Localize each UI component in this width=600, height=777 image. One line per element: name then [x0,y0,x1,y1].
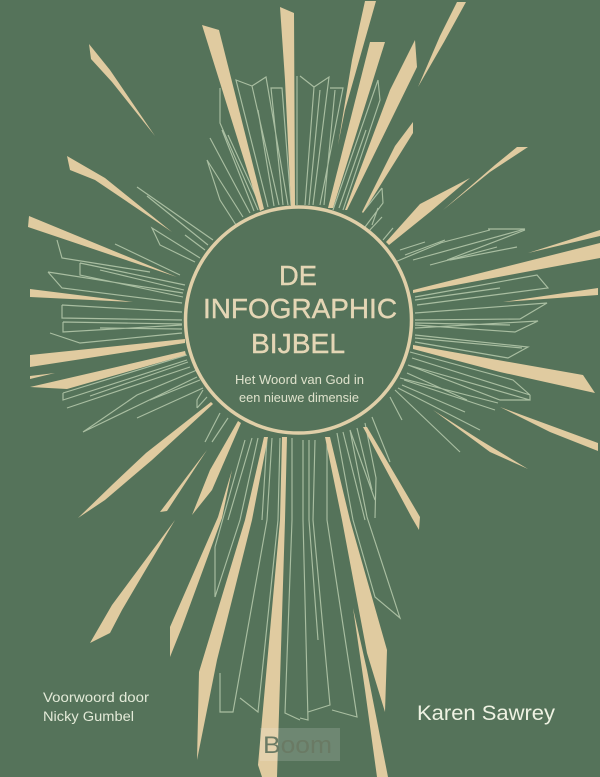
watermark: Boom [263,732,332,759]
ray: left thin [30,373,55,379]
ray: upper left long [28,216,177,277]
subtitle: een nieuwe dimensie [239,391,359,405]
subtitle: Het Woord van God in [235,373,364,387]
foreword credit [43,690,150,724]
ray: top thin right [338,1,376,145]
author name: Karen Sawrey [417,702,556,725]
ray: bottom left short [192,421,241,515]
ray: lower left thin [160,450,207,512]
ray: bottom left wide [197,437,268,760]
subtitle [235,373,364,405]
ray: top centre [280,7,295,206]
ray: right lower detached [500,407,598,451]
ray: right lower thin [433,410,528,469]
ray: top left wide [202,25,264,211]
ray: far right long [413,243,600,293]
ray: bottom right long [325,437,387,712]
ray: top right detached [418,2,466,87]
ray: far right thin [528,230,600,253]
title: DE [279,260,317,291]
ray: right upper diagonal [386,178,470,245]
ray: right upper detached [443,147,528,210]
title: INFOGRAPHIC [203,293,397,324]
watermark [260,728,340,761]
ray: upper left short [67,156,172,232]
ray: upper right long [345,40,417,210]
foreword credit: Voorwoord door [43,690,150,705]
ray: lower left [170,470,232,657]
ray: left upper [30,289,133,302]
title: BIJBEL [251,328,345,359]
ray: bottom right detached [353,608,388,777]
ray: upper right short [362,122,413,213]
central circle [186,207,412,433]
ray: bottom left detached [90,520,175,643]
ray: top wide right [328,42,385,208]
ray: right wide [413,345,595,393]
foreword credit: Nicky Gumbel [43,709,134,724]
ray: left wide [30,339,185,367]
ray: far right short [503,288,598,302]
ray: lower left diagonal [78,402,213,518]
ray: lower right [363,427,420,530]
page outline lines radiating from the circle [48,76,548,720]
ray: bottom centre [258,437,287,777]
ray: left lower [30,351,186,389]
ray: upper left detached [89,44,155,136]
title [203,260,397,359]
